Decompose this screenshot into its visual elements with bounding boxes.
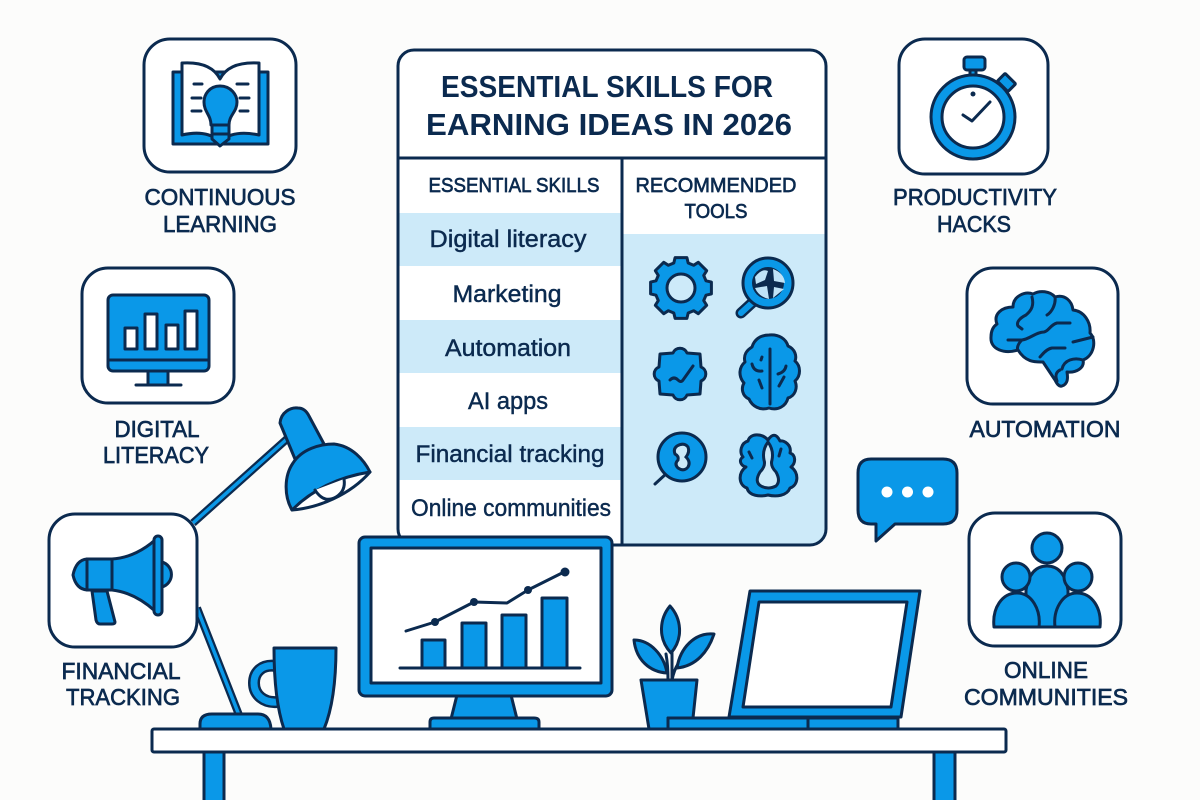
lamp head — [280, 408, 370, 510]
plant pot — [641, 680, 697, 729]
skills list: Marketing — [452, 281, 562, 308]
icon: magnifier with globe — [741, 258, 793, 313]
label: PRODUCTIVITY — [893, 184, 1057, 210]
icon: check badge — [654, 348, 706, 400]
label — [964, 657, 1128, 710]
speech bubble — [858, 459, 957, 541]
label — [144, 184, 296, 237]
card: digital literacy — [82, 268, 234, 468]
plant — [634, 606, 714, 729]
icon: brain with keyhole — [740, 435, 797, 496]
desk left leg — [204, 752, 224, 800]
mug handle — [254, 666, 277, 702]
skills list: Online communities — [411, 495, 611, 522]
icon: magnifier with keyhole — [655, 433, 706, 484]
plant leaves — [634, 606, 714, 673]
monitor stand — [451, 695, 517, 719]
mug — [254, 648, 336, 729]
icon: group of people — [994, 533, 1100, 627]
label: AUTOMATION — [970, 416, 1120, 442]
skills list: Financial tracking — [416, 441, 604, 468]
skills list: Digital literacy — [430, 226, 586, 253]
monitor — [359, 537, 612, 729]
lamp — [193, 408, 370, 729]
card: online communities — [964, 513, 1128, 710]
column heading: recommended tools: TOOLS — [684, 201, 748, 223]
laptop lid — [729, 591, 920, 717]
column heading: essential skills: ESSENTIAL SKILLS — [428, 175, 600, 197]
desk — [152, 729, 1006, 800]
title: ESSENTIAL SKILLS FOR — [441, 69, 773, 104]
panel: skills and tools table — [398, 50, 826, 545]
card: continuous learning — [144, 39, 296, 237]
column heading: recommended tools: RECOMMENDED — [636, 175, 796, 197]
laptop — [668, 591, 920, 729]
icon: monitor with bars — [108, 295, 209, 385]
icon: gear — [651, 258, 711, 318]
lamp lower arm — [197, 608, 239, 715]
label: TRACKING — [66, 684, 180, 710]
plant stems — [666, 652, 678, 680]
laptop screen — [743, 602, 907, 707]
skills list: Automation — [445, 335, 571, 362]
skills list — [411, 226, 611, 522]
label: LITERACY — [103, 442, 209, 468]
tools column background — [623, 234, 825, 544]
desk right leg — [934, 752, 955, 800]
card: productivity hacks — [893, 39, 1057, 237]
title — [426, 69, 792, 142]
title: EARNING IDEAS IN 2026 — [426, 107, 792, 142]
label: DIGITAL — [114, 416, 200, 442]
monitor frame — [359, 537, 612, 696]
icon: brain — [991, 292, 1094, 386]
trend line — [406, 568, 570, 631]
label: LEARNING — [163, 211, 277, 237]
desk top — [152, 729, 1006, 752]
laptop keyboard base — [668, 718, 898, 729]
icon: brain, top view — [740, 335, 800, 409]
skill row highlights — [399, 213, 621, 480]
icon: stopwatch — [931, 57, 1016, 159]
icon: book with light bulb — [173, 63, 268, 146]
card: financial tracking — [49, 514, 197, 710]
monitor screen — [371, 548, 601, 683]
label: ONLINE — [1004, 657, 1088, 683]
label — [62, 658, 181, 710]
label: HACKS — [937, 211, 1011, 237]
lamp base — [200, 714, 271, 729]
skills list: AI apps — [468, 388, 548, 415]
label — [893, 184, 1057, 237]
label: CONTINUOUS — [144, 184, 296, 210]
column heading: recommended tools — [636, 175, 796, 223]
monitor base — [430, 718, 539, 729]
mug body — [274, 648, 336, 729]
card: automation — [967, 268, 1120, 442]
label — [103, 416, 209, 468]
bar chart — [400, 598, 580, 668]
label: FINANCIAL — [62, 658, 181, 684]
icon: megaphone — [73, 536, 171, 624]
lamp upper arm — [193, 438, 288, 523]
label: COMMUNITIES — [964, 684, 1128, 710]
